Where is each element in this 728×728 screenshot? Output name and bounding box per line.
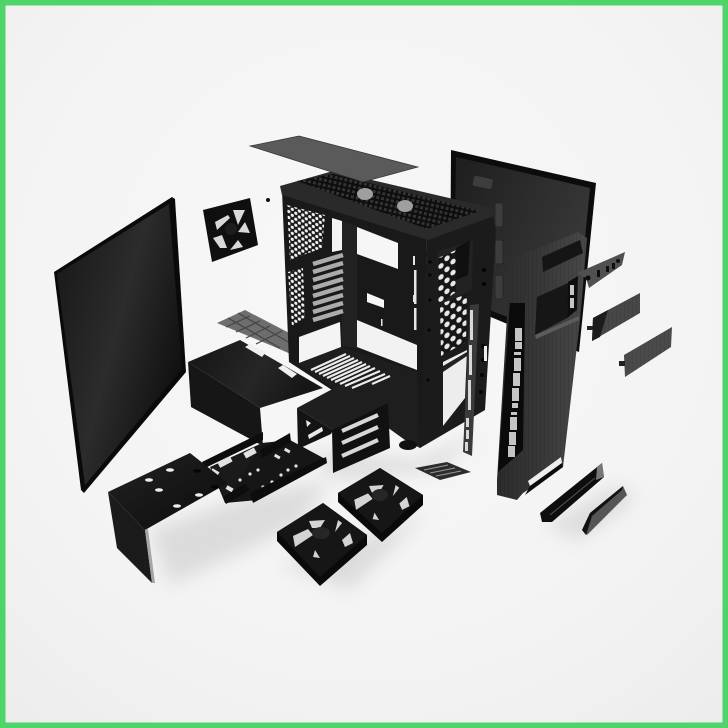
fan gaps [213, 210, 250, 250]
drive bay cover upper [587, 293, 640, 341]
top fan glimpses [357, 188, 373, 200]
expansion slots [313, 255, 343, 320]
bay window [535, 283, 568, 335]
rear fan [203, 198, 258, 262]
front IO bracket [577, 252, 625, 288]
shroud slots [245, 344, 266, 357]
rear honeycomb top [287, 205, 325, 260]
bottom bent plate [108, 453, 228, 583]
small chassis strip [415, 462, 471, 480]
drive cage [297, 385, 390, 473]
floor vent slits [311, 354, 390, 388]
side mesh strip [498, 303, 525, 472]
front honeycomb upper [438, 250, 456, 305]
front lower opening [443, 350, 467, 426]
power supply shroud [188, 340, 323, 446]
tray small slits [381, 256, 416, 330]
motherboard tray cutout small [367, 293, 384, 308]
rear window [332, 218, 342, 252]
floor [299, 347, 420, 448]
main chassis [280, 171, 496, 450]
lower edge highlight [535, 316, 579, 339]
panel slots [472, 175, 503, 299]
bottom cover piece dark [540, 463, 604, 522]
front panel bezel [497, 232, 587, 500]
PSU opening [299, 322, 341, 363]
rear honeycomb lower [288, 268, 305, 327]
front right slot [484, 346, 487, 361]
top cover [280, 171, 494, 240]
bottom vent slit [528, 457, 562, 486]
soft floor shadows [150, 430, 635, 590]
drive tray rails [202, 432, 327, 504]
bottom foot [399, 440, 417, 450]
top dust filter panel [250, 136, 418, 182]
upper opening [542, 240, 583, 272]
drive bay cover lower [619, 327, 672, 377]
divider pillar [342, 221, 357, 348]
ladder bracket [463, 304, 479, 456]
side panel left [54, 197, 186, 493]
motherboard tray cutout large [357, 227, 398, 269]
front honeycomb lower [440, 294, 467, 356]
opening below tray [357, 320, 417, 370]
front frame [420, 210, 496, 448]
back side panel [450, 150, 596, 352]
fan upper floor [338, 468, 423, 542]
mesh filter plate [217, 310, 295, 355]
fan lower floor [277, 503, 367, 586]
front edge holes [426, 260, 486, 394]
loose screw [266, 198, 270, 202]
chassis shell rear and interior [282, 190, 427, 448]
bottom cover piece grey [582, 486, 627, 535]
top mesh [297, 174, 480, 229]
